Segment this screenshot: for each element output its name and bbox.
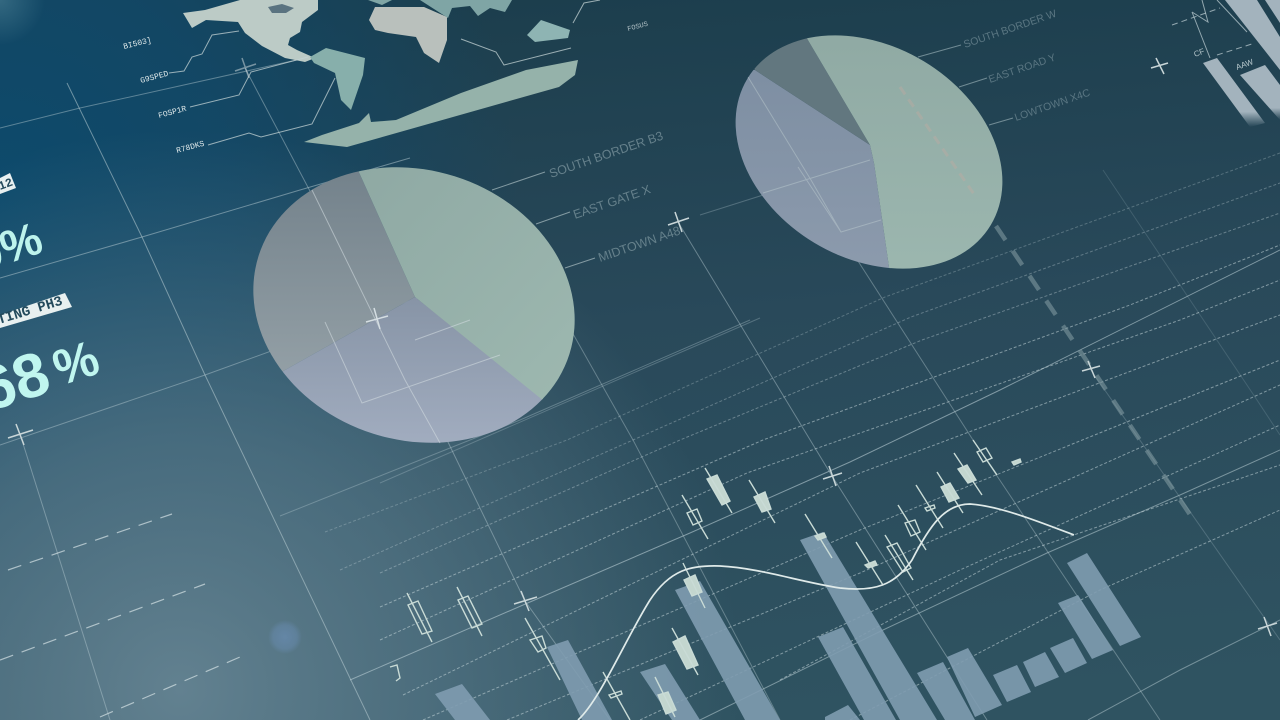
map: antarctica xyxy=(304,60,578,147)
map labels: G9SPED xyxy=(139,70,170,86)
top right labels xyxy=(1193,47,1255,72)
pie 1 labels: MIDTOWN A48 xyxy=(596,224,682,265)
pie 2 labels: LOWTOWN X4C xyxy=(1013,87,1092,124)
filled candles xyxy=(655,453,1021,717)
pie chart 1 xyxy=(253,167,575,444)
map labels xyxy=(123,21,649,156)
map: south america xyxy=(310,48,365,110)
bar: top right 4 xyxy=(1265,0,1280,23)
pie 1 slice: grey xyxy=(253,172,415,372)
grey dashed connector xyxy=(996,226,1195,522)
map labels: FOSUS xyxy=(627,21,649,34)
pie 1 slice: lavender xyxy=(282,297,543,443)
pie 1 labels xyxy=(492,129,682,268)
map: north america xyxy=(183,0,318,62)
pie 2 slice: lavender xyxy=(736,70,889,268)
map labels: FOSP1R xyxy=(157,105,188,121)
top right labels: AAW xyxy=(1235,57,1255,72)
bar: top right 2 xyxy=(1240,65,1280,120)
world map xyxy=(183,0,578,147)
candlesticks xyxy=(407,440,1021,720)
pie chart 2 xyxy=(736,35,1002,269)
bar chart xyxy=(435,532,1141,720)
bar: top right 3 xyxy=(1225,0,1280,70)
map: hudson bay xyxy=(268,4,294,13)
bar: top right 1 xyxy=(1203,58,1265,127)
stat percent 2: % xyxy=(46,329,106,396)
lens flare xyxy=(268,620,302,654)
pie 1 cross xyxy=(366,308,388,329)
map: africa xyxy=(369,7,447,63)
left stat panel xyxy=(0,173,106,425)
top right dashed marks xyxy=(1172,8,1255,55)
dotted grid lines xyxy=(325,153,1280,720)
pie 1 inner lines xyxy=(312,190,500,443)
small bracket xyxy=(390,665,400,681)
top right bars xyxy=(1172,0,1280,127)
pie 2 slice: green xyxy=(807,35,1002,269)
pie 2 slice: dark grey xyxy=(754,38,870,144)
pie 1 slice: green xyxy=(358,167,575,400)
hollow candles xyxy=(407,440,997,720)
map labels: R78DKS xyxy=(175,140,206,156)
top right line marks xyxy=(1192,0,1247,58)
crosses xyxy=(8,58,1277,636)
trend curve xyxy=(578,504,1074,720)
map: eurasia xyxy=(368,0,512,18)
pie 2 red mark xyxy=(900,87,976,197)
top right labels: CF xyxy=(1193,47,1206,59)
pie 2 inner lines xyxy=(748,77,881,232)
pie 1 labels: SOUTH BORDER B3 xyxy=(547,129,665,181)
dashed lines bottom left xyxy=(0,514,240,717)
map: australia xyxy=(527,20,570,42)
pie 2 labels: EAST ROAD Y xyxy=(987,52,1057,86)
pie 1 labels: EAST GATE X xyxy=(571,182,653,222)
map labels: BI503] xyxy=(123,36,153,52)
pie 2 labels: SOUTH BORDER W xyxy=(962,8,1058,51)
map leader lines xyxy=(169,0,600,145)
pie 2 labels xyxy=(918,8,1092,125)
